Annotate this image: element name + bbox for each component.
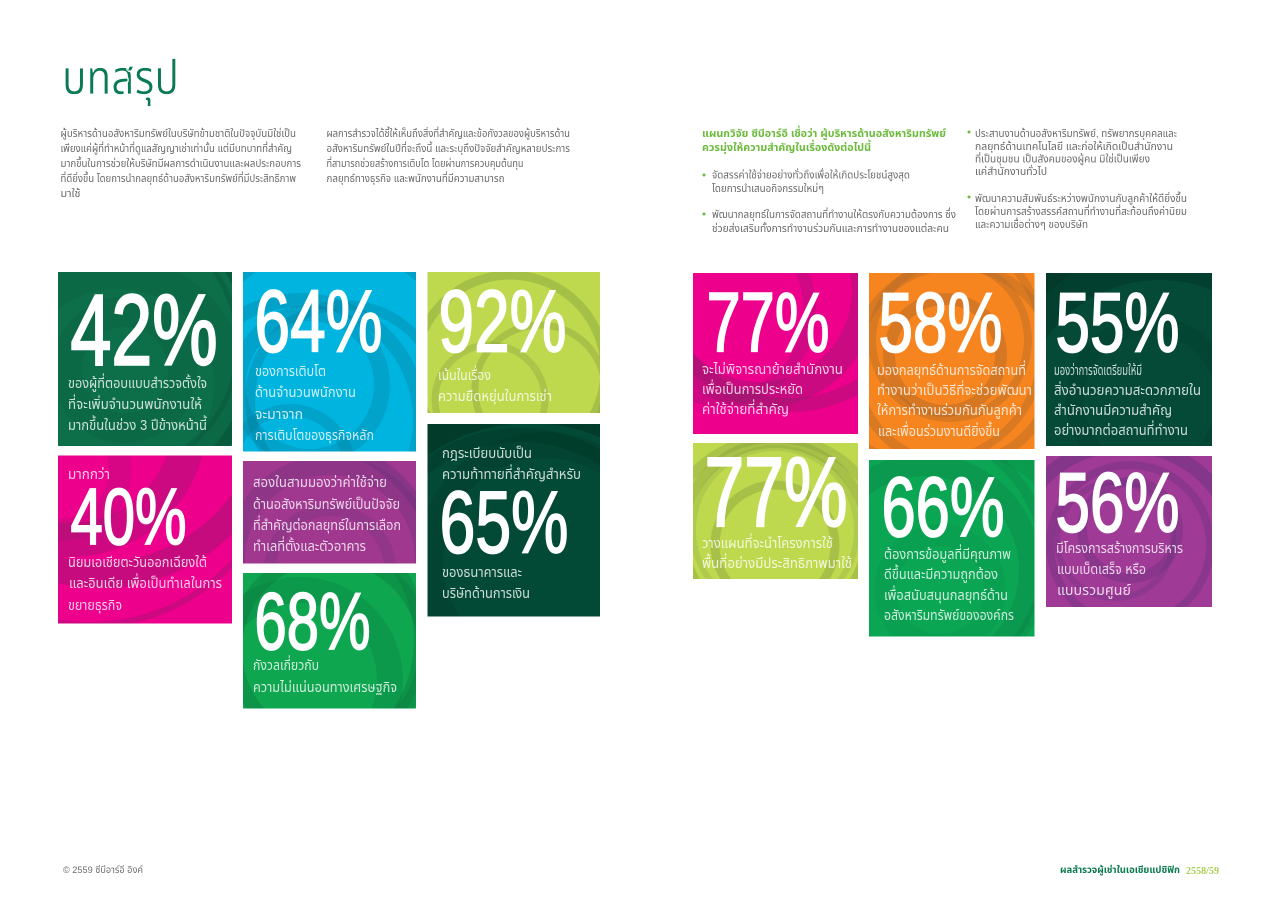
- caption: 40%: ขยายธุรกิจ: [68, 598, 122, 614]
- footer: edition year: 2558/59: [1186, 866, 1219, 877]
- caption: 66%: ต้องการข้อมูลที่มีคุณภาพ: [884, 544, 1011, 563]
- caption: 68%: กังวลเกี่ยวกับ: [253, 655, 319, 674]
- caption: 64%: การเติบโตของธุรกิจหลัก: [255, 428, 374, 444]
- caption: 55%: สำนักงานมีความสำคัญ: [1054, 403, 1172, 419]
- heading: research recommendation: แผนกวิจัย ซีบีอาร์อี เชื่อว่า ผู้บริหารด้านอสังหาริมทรัพย์: [702, 125, 946, 140]
- caption: 55%: สิ่งอำนวยความสะดวกภายใน: [1054, 381, 1201, 399]
- caption: 56%: แบบเบ็ดเสร็จ หรือ: [1057, 562, 1146, 578]
- caption: 92%: [438, 365, 552, 405]
- panel: 66%: [869, 460, 1034, 636]
- caption: purple two-thirds: ทำเลที่ตั้งและตัวอาคาร: [253, 536, 366, 555]
- heading: research recommendation: [702, 125, 946, 154]
- caption: 68%: ความไม่แน่นอนทางเศรษฐกิจ: [253, 679, 397, 696]
- caption: 92%: เน้นในเรื่อง: [438, 365, 491, 384]
- panel: purple two-thirds: [243, 461, 416, 564]
- panel: 42%: [58, 272, 232, 446]
- caption: 77% lime: วางแผนที่จะนำโครงการใช้: [702, 533, 833, 552]
- number: 65%: 65%: [440, 472, 568, 572]
- caption: 66%: [884, 544, 1014, 624]
- caption: 92%: ความยืดหยุ่นในการเช่า: [438, 388, 552, 405]
- caption: 40% lead-in: มากกว่า: [68, 466, 110, 483]
- panel: 40%: [58, 456, 232, 624]
- caption: 65% lead-in: [442, 445, 581, 483]
- caption: 42%: มากขึ้นในช่วง 3 ปีข้างหน้านี้: [68, 415, 207, 434]
- panel: 77% lime: [693, 443, 858, 579]
- caption: 56%: มีโครงการสร้างการบริหาร: [1056, 541, 1183, 557]
- number: 58%: 58%: [878, 276, 1002, 370]
- caption: purple two-thirds: ด้านอสังหาริมทรัพย์เป็นปัจจัย: [253, 496, 400, 513]
- caption: 64%: ของการเติบโต: [255, 364, 326, 380]
- text block: intro column 2: ผลการสำรวจได้ชี้ให้เห็นถึงสิ่งที่สำคัญและข้อกังวลของผู้บริหารด้าน: [326, 126, 570, 140]
- number: 92%: 92%: [438, 272, 566, 370]
- caption: 65% lead-in: ความท้าทายที่สำคัญสำหรับ: [442, 464, 581, 483]
- caption: purple two-thirds: ที่สำคัญต่อกลยุทธ์ในการเลือก: [253, 515, 401, 534]
- bullet list: right: กลยุทธ์ด้านเทคโนโลยี และก่อให้เกิดเป็นสำนักงาน: [975, 140, 1173, 153]
- caption: 77% pink: เพื่อเป็นการประหยัด: [702, 379, 803, 398]
- caption: 58%: [877, 360, 1032, 440]
- bullet list: left: จัดสรรค่าใช้จ่ายอย่างทั่วถึงเพื่อให้เกิดประโยชน์สูงสุด: [712, 168, 910, 182]
- text block: intro column 2: อสังหาริมทรัพย์ในปีที่จะถึงนี้ และระบุถึงปัจจัยสำคัญหลายประการ: [326, 141, 570, 155]
- panel: 64%: [243, 272, 416, 452]
- caption: 77% lime: พื้นที่อย่างมีประสิทธิภาพมาใช้: [702, 553, 852, 572]
- caption: 77% lime: [702, 533, 852, 572]
- text block: intro column 1: ผู้บริหารด้านอสังหาริมทรัพย์ในบริษัทข้ามชาติในปัจจุบันมิใช่เป็น: [60, 127, 296, 140]
- number: 66%: 66%: [882, 460, 1004, 554]
- text block: intro column 1: ที่ดียิ่งขึ้น โดยการนำกลยุทธ์ด้านอสังหาริมทรัพย์ที่มีประสิทธิภาพ: [60, 171, 296, 185]
- caption: 77% pink: [702, 361, 843, 418]
- caption: 68%: [253, 655, 397, 696]
- caption: 65% lead-in: กฎระเบียบนับเป็น: [442, 445, 532, 462]
- bullet list: left: [702, 168, 956, 235]
- caption: 56%: แบบรวมศูนย์: [1057, 583, 1131, 599]
- caption: 40%: [68, 555, 222, 614]
- number: 68%: 68%: [254, 577, 370, 667]
- bullet list: right: โดยผ่านการสร้างสรรค์สถานที่ทำงานที่สะท้อนถึงค่านิยม: [975, 204, 1187, 218]
- caption: 65%: บริษัทด้านการเงิน: [442, 586, 530, 602]
- caption: 66%: ดีขึ้นและมีความถูกต้อง: [884, 564, 998, 583]
- bullet list: left: ช่วยส่งเสริมทั้งการทำงานร่วมกันและการทำงานของแต่ละคน: [712, 222, 949, 235]
- caption: 42%: ของผู้ที่ตอบแบบสำรวจตั้งใจ: [68, 373, 207, 392]
- bullet list: right: ที่เป็นชุมชน เป็นสังคมของผู้คน มิใช่เป็นเพียง: [975, 152, 1150, 166]
- panel: 58%: [869, 273, 1034, 449]
- bullet list: right: แค่สำนักงานทั่วไป: [975, 165, 1047, 178]
- number: 64%: 64%: [254, 272, 382, 370]
- panel: 56%: [1046, 456, 1212, 607]
- caption: purple two-thirds: [253, 474, 401, 555]
- caption: 40%: และอินเดีย เพื่อเป็นทำเลในการ: [69, 573, 222, 592]
- caption: 56%: [1056, 541, 1183, 599]
- text block: intro column 2: ที่สามารถช่วยสร้างการเติบโต โดยผ่านการควบคุมต้นทุน: [326, 156, 524, 170]
- text block: intro column 1: มาใช้: [60, 188, 81, 200]
- caption: 64%: ด้านจำนวนพนักงาน: [255, 385, 356, 401]
- caption: 40%: นิยมเอเชียตะวันออกเฉียงใต้: [68, 555, 207, 571]
- caption: 58%: ทำงานว่าเป็นวิธีที่จะช่วยพัฒนา: [877, 380, 1032, 399]
- caption: 58%: และเพื่อนร่วมงานดียิ่งขึ้น: [878, 421, 1000, 440]
- bullet list: left: พัฒนากลยุทธ์ในการจัดสถานที่ทำงานให้ตรงกับความต้องการ ซึ่ง: [712, 207, 956, 221]
- caption: purple two-thirds: สองในสามมองว่าค่าใช้จ่าย: [253, 474, 387, 491]
- panel: 65%: [428, 424, 600, 616]
- caption: 55%: อย่างมากต่อสถานที่ทำงาน: [1054, 420, 1188, 439]
- footer: copyright: © 2559 ซีบีอาร์อี อิงค์: [63, 865, 143, 876]
- caption: 42%: ที่จะเพิ่มจำนวนพนักงานให้: [68, 394, 202, 413]
- caption: 42%: [68, 373, 207, 434]
- caption: 64%: จะมาจาก: [255, 407, 303, 423]
- bullet list: right: และความเชื่อต่างๆ ของบริษัท: [975, 217, 1088, 231]
- text block: intro column 1: [60, 127, 301, 200]
- bullet list: right: ประสานงานด้านอสังหาริมทรัพย์, ทรัพยากรบุคคลและ: [975, 128, 1177, 140]
- bullet list: right: [968, 128, 1187, 231]
- text block: intro column 2: [326, 126, 570, 185]
- title: บทสรุป: [62, 51, 179, 106]
- panel: 92%: [428, 272, 600, 413]
- number: 42%: 42%: [70, 274, 218, 386]
- caption: 65%: ของธนาคารและ: [442, 565, 522, 581]
- footer: report name: ผลสำรวจผู้เช่าในเอเชียแปซิฟิก: [1060, 864, 1180, 876]
- panel: 55%: [1046, 273, 1212, 446]
- caption: 66%: อสังหาริมทรัพย์ขององค์กร: [884, 608, 1014, 624]
- panel: 68%: [243, 573, 416, 708]
- text block: intro column 1: มากขึ้นในการช่วยให้บริษัทมีผลการดำเนินงานและผลประกอบการ: [60, 156, 301, 170]
- bullet list: right: พัฒนาความสัมพันธ์ระหว่างพนักงานกับลูกค้าให้ดียิ่งขึ้น: [975, 191, 1187, 205]
- caption: 65%: [442, 565, 530, 602]
- caption: 58%: มองกลยุทธ์ด้านการจัดสถานที่: [877, 360, 1026, 379]
- number: 77% lime: 77%: [704, 437, 848, 547]
- bullet list: left: โดยการนำเสนอกิจกรรมใหม่ๆ: [712, 182, 824, 195]
- caption: 64%: [255, 364, 374, 444]
- text block: intro column 1: เพียงแค่ผู้ที่ทำหน้าที่ดูแลสัญญาเช่าเท่านั้น แต่มีบทบาทที่สำคัญ: [60, 141, 292, 155]
- caption: 77% pink: จะไม่พิจารณาย้ายสำนักงาน: [702, 361, 843, 378]
- number: 55%: 55%: [1056, 276, 1180, 370]
- number: 77% pink: 77%: [706, 276, 830, 370]
- caption: 58%: ให้การทำงานร่วมกันกับลูกค้า: [877, 402, 1022, 419]
- caption: 55%: [1054, 362, 1201, 439]
- number: 56%: 56%: [1056, 456, 1180, 550]
- panel: 77% pink: [693, 273, 858, 434]
- caption: 55%: มองว่าการจัดเตรียมให้มี: [1054, 362, 1142, 379]
- caption: 77% pink: ค่าใช้จ่ายที่สำคัญ: [702, 399, 789, 418]
- heading: research recommendation: ควรมุ่งให้ความสำคัญในเรื่องดังต่อไปนี้: [702, 139, 872, 154]
- text block: intro column 2: กลยุทธ์ทางธุรกิจ และพนักงานที่มีความสามารถ: [326, 171, 504, 185]
- number: 40%: 40%: [70, 472, 186, 561]
- caption: 66%: เพื่อสนับสนุนกลยุทธ์ด้าน: [884, 585, 1008, 604]
